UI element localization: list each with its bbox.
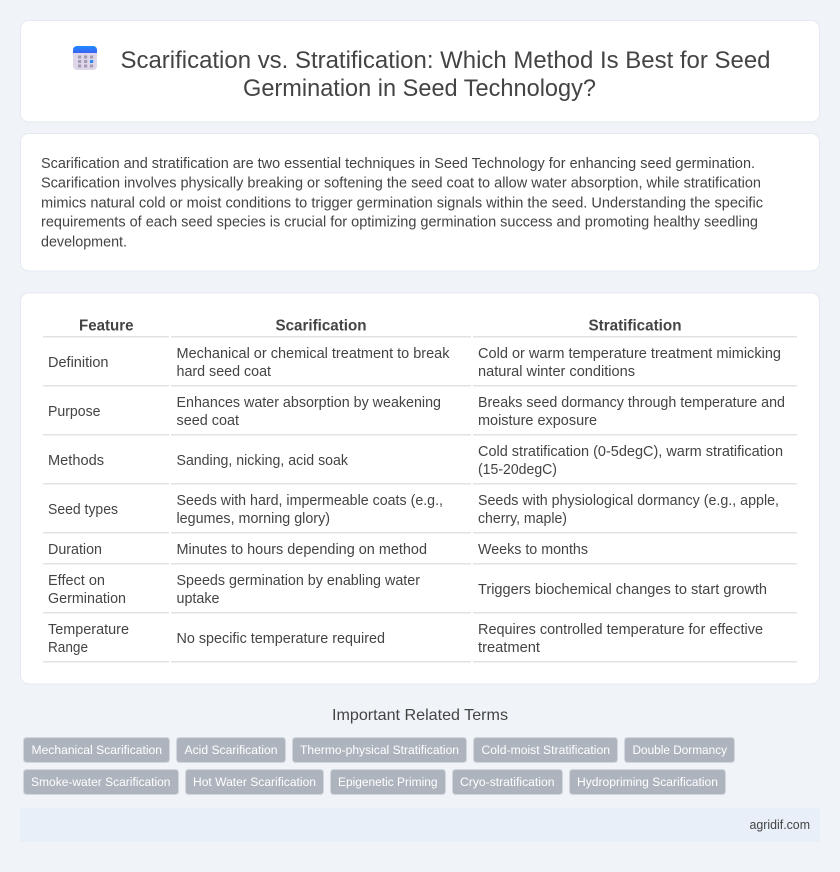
row: seed types: legumes, morning glory) (176, 511, 330, 527)
row: effect on germination: Effect on (48, 573, 105, 589)
row: definition (48, 346, 781, 380)
row: temperature range: Temperature (48, 622, 129, 638)
row: duration: Duration (48, 542, 102, 558)
row: duration: Weeks to months (478, 542, 588, 558)
row: temperature range (48, 622, 763, 656)
row: seed types: Seeds with hard, impermeable coats (e.g., (176, 493, 443, 509)
text block: introduction paragraph: Scarification and stratification are two essential techniques in Seed Technology for enhancing seed germination. (41, 156, 755, 172)
row: purpose: Enhances water absorption by weakening (176, 395, 441, 411)
row: methods: (15-20degC) (478, 462, 557, 478)
row: temperature range: Range (48, 640, 88, 656)
row: effect on germination: Germination (48, 591, 126, 607)
row: definition: natural winter conditions (478, 364, 635, 380)
row: temperature range: treatment (478, 640, 540, 656)
row: effect on germination: uptake (176, 591, 220, 607)
row: definition: Mechanical or chemical treatment to break (176, 346, 450, 362)
panel: comparison table (20, 293, 820, 684)
tags: related terms: Hydropriming Scarification (577, 775, 718, 789)
row: purpose: moisture exposure (478, 413, 597, 429)
row: duration: Minutes to hours depending on method (176, 542, 427, 558)
row: seed types: cherry, maple) (478, 511, 567, 527)
text block: introduction paragraph: mimics natural cold or moist conditions to trigger germination signals within the seed. Understanding the specific (41, 196, 763, 212)
panel: header (20, 20, 820, 122)
row: definition: Definition (48, 355, 108, 371)
table header: Scarification (276, 318, 366, 334)
row: methods: Methods (48, 453, 104, 469)
tags: related terms: Mechanical Scarification (32, 743, 162, 757)
row: purpose: Purpose (48, 404, 100, 420)
tags: related terms: Hot Water Scarification (193, 775, 316, 789)
tags: related terms: Smoke-water Scarification (31, 775, 171, 789)
row: seed types: Seeds with physiological dormancy (e.g., apple, (478, 493, 779, 509)
table header: Feature (79, 318, 134, 334)
footer (20, 808, 820, 842)
row: temperature range: Requires controlled temperature for effective (478, 622, 763, 638)
text block: introduction paragraph (41, 156, 763, 250)
row: purpose (48, 395, 785, 429)
row: purpose: Breaks seed dormancy through temperature and (478, 395, 785, 411)
row: definition: Cold or warm temperature treatment mimicking (478, 346, 781, 362)
row: temperature range: No specific temperature required (176, 631, 385, 647)
heading: important related terms: Important Related Terms (332, 707, 508, 724)
row: seed types (48, 493, 779, 527)
table header: Stratification (588, 318, 682, 334)
row: effect on germination (48, 573, 767, 607)
text block: introduction paragraph: Scarification involves physically breaking or softening the seed coat to allow water absorption, while stratification (41, 176, 761, 192)
row: methods (48, 444, 783, 478)
text block: introduction paragraph: development. (41, 234, 127, 250)
icon: calendar (73, 46, 97, 70)
tags: related terms: Double Dormancy (632, 743, 728, 757)
tags: related terms: Epigenetic Priming (338, 775, 438, 789)
row: methods: Cold stratification (0-5degC), warm stratification (478, 444, 783, 460)
row: methods: Sanding, nicking, acid soak (176, 453, 349, 469)
row: effect on germination: Speeds germination by enabling water (176, 573, 420, 589)
tags: related terms: Acid Scarification (184, 743, 278, 757)
tags: related terms: Cold-moist Stratification (482, 743, 610, 757)
row: effect on germination: Triggers biochemical changes to start growth (478, 582, 767, 598)
table header (79, 318, 682, 334)
title (120, 47, 770, 102)
row: seed types: Seed types (48, 502, 118, 518)
row: duration (48, 542, 588, 558)
title: Scarification vs. Stratification: Which Method Is Best for Seed (120, 47, 770, 74)
tags: related terms: Cryo-stratification (460, 775, 555, 789)
panel: introduction (20, 134, 820, 271)
footer source text: agridif.com (750, 818, 810, 832)
row: purpose: seed coat (176, 413, 239, 429)
tags: related terms: Thermo-physical Stratification (300, 743, 459, 757)
row: definition: hard seed coat (176, 364, 271, 380)
tags: related terms (24, 738, 734, 794)
title: Germination in Seed Technology? (243, 75, 596, 102)
text block: introduction paragraph: requirements of each seed species is crucial for optimizing germination success and promoting healthy seedling (41, 214, 758, 230)
